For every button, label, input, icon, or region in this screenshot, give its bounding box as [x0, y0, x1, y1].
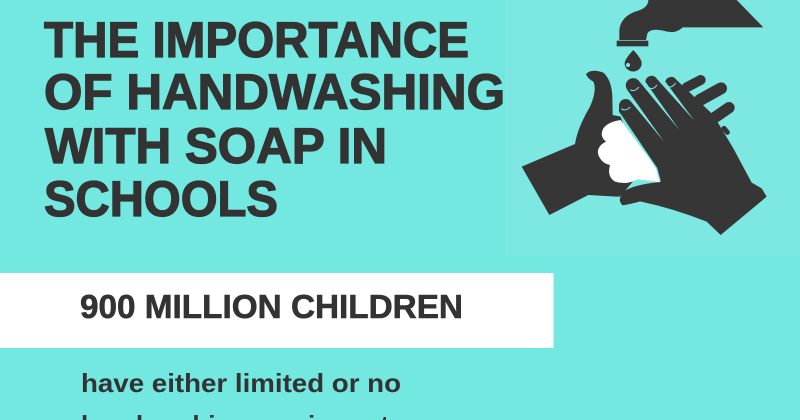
icon: back hand with thumb [522, 71, 729, 215]
title: OF HANDWASHING [44, 64, 505, 120]
title: WITH SOAP IN [45, 118, 387, 174]
title: SCHOOLS [44, 171, 278, 227]
title [44, 12, 505, 227]
icon: water drop [625, 50, 642, 71]
icon: faucet [617, 0, 763, 46]
icon: soap foam [598, 120, 660, 183]
banner: 900 million children: 900 MILLION CHILDREN [80, 288, 463, 325]
icon: hands washing under faucet [505, 0, 800, 256]
banner: 900 million children [0, 273, 554, 348]
title: THE IMPORTANCE [44, 12, 469, 68]
icon: front hand [619, 76, 767, 235]
body text: have either limited or no [81, 368, 401, 398]
body text [81, 368, 401, 420]
